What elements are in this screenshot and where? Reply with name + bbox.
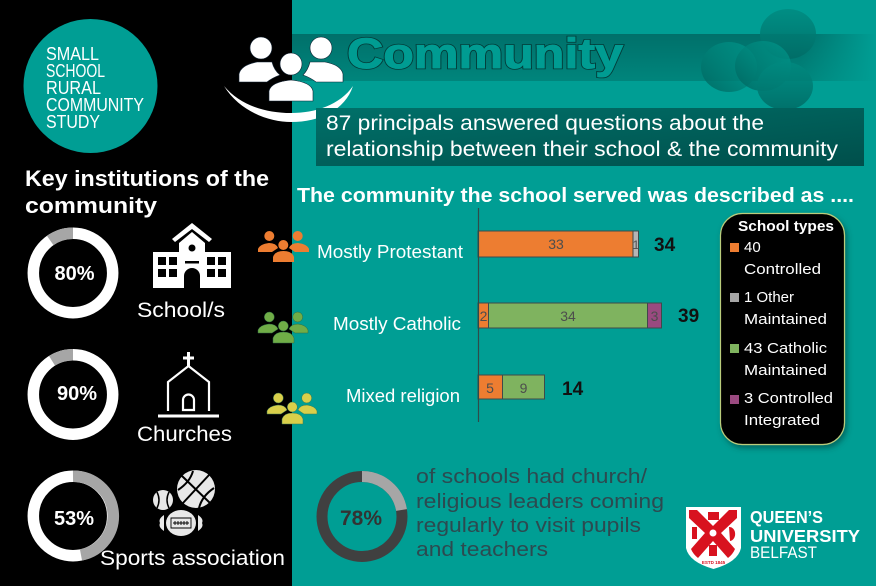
axis bbox=[478, 208, 480, 422]
title band bbox=[292, 34, 876, 81]
heading: key institutions: Key institutions of the bbox=[25, 166, 269, 191]
bar values: 1 bbox=[633, 238, 640, 252]
donut: sports 53% bbox=[33, 476, 113, 556]
panel: teal main area bbox=[292, 0, 876, 586]
logo: Queen's University Belfast: ESTD 1845 bbox=[702, 560, 726, 565]
icon: green people bbox=[258, 312, 308, 343]
bar values: 3 bbox=[651, 308, 659, 324]
heading: key institutions bbox=[25, 166, 269, 218]
title: Community: Community bbox=[347, 30, 623, 78]
legend: school types: 3 Controlled bbox=[744, 390, 833, 407]
category labels: Mostly Protestant bbox=[317, 242, 463, 262]
heading: key institutions: community bbox=[25, 193, 158, 218]
decorative overlapping circles bbox=[701, 9, 816, 110]
legend: school types: Integrated bbox=[744, 412, 820, 429]
icon: church bbox=[158, 352, 219, 416]
label: sports association: Sports association bbox=[100, 547, 285, 570]
icon: school building bbox=[153, 223, 231, 288]
heading: community description: The community the school served was described as .... bbox=[297, 185, 854, 207]
totals bbox=[562, 235, 699, 400]
donut: churches 90% bbox=[33, 355, 113, 434]
icon: orange people bbox=[258, 231, 309, 262]
panel: black left column bbox=[0, 0, 292, 586]
bar values bbox=[480, 236, 659, 396]
donut: religious leaders 78% bbox=[322, 476, 402, 556]
logo: Small School Rural Community Study: RURAL bbox=[46, 78, 101, 98]
legend: school types: 40 bbox=[744, 239, 761, 256]
legend: school types: 1 Other bbox=[744, 289, 794, 306]
panel: intro text box: 87 principals answered questions about the bbox=[326, 112, 764, 135]
logo: Small School Rural Community Study: SMALL bbox=[46, 44, 99, 64]
bar values: 2 bbox=[480, 308, 488, 324]
donut: schools 80% bbox=[33, 233, 113, 313]
text: religious leaders: religious leaders coming bbox=[416, 491, 664, 513]
panel: intro text box bbox=[316, 108, 864, 166]
logo: Small School Rural Community Study: STUDY bbox=[46, 112, 100, 132]
totals: 14 bbox=[562, 379, 584, 400]
legend: school types: Maintained bbox=[744, 362, 827, 379]
logo: Queen's University Belfast: BELFAST bbox=[750, 544, 817, 562]
donut: religious leaders 78%: 78% bbox=[340, 507, 382, 530]
title: Community: Community bbox=[347, 30, 623, 78]
logo: Small School Rural Community Study: COMMUNITY bbox=[46, 95, 144, 115]
donut: churches 90%: 90% bbox=[57, 383, 97, 405]
legend: school types: Controlled bbox=[744, 261, 821, 278]
donut: sports 53%: 53% bbox=[54, 508, 94, 530]
bar values: 5 bbox=[486, 380, 494, 396]
icon: community people and smile bbox=[224, 37, 353, 122]
category labels bbox=[317, 242, 463, 406]
stacked bar chart bbox=[317, 208, 699, 422]
totals: 39 bbox=[678, 306, 699, 327]
bars bbox=[478, 231, 662, 399]
bar values: 34 bbox=[560, 308, 576, 324]
bar values: 9 bbox=[520, 380, 528, 396]
legend: school types: Maintained bbox=[744, 311, 827, 328]
text: religious leaders: of schools had church/ bbox=[416, 466, 648, 488]
panel: intro text box: relationship between their school & the community bbox=[326, 138, 839, 161]
title band fade bbox=[800, 34, 876, 81]
category labels: Mixed religion bbox=[346, 386, 460, 406]
logo: Small School Rural Community Study bbox=[24, 19, 158, 153]
logo: Queen's University Belfast: QUEEN’S bbox=[750, 507, 823, 527]
logo: Queen's University Belfast bbox=[686, 507, 860, 569]
logo: Queen's University Belfast: UNIVERSITY bbox=[750, 526, 860, 546]
label: schools: School/s bbox=[137, 299, 225, 322]
label: churches: Churches bbox=[137, 423, 232, 446]
bar values: 33 bbox=[548, 236, 564, 252]
logo: Small School Rural Community Study: SCHOOL bbox=[46, 61, 105, 81]
text: religious leaders: and teachers bbox=[416, 539, 548, 561]
totals: 34 bbox=[654, 235, 676, 256]
legend: school types: School types bbox=[738, 219, 834, 235]
icon: yellow people bbox=[267, 393, 317, 424]
legend: school types: 43 Catholic bbox=[744, 340, 828, 357]
text: religious leaders: regularly to visit pupils bbox=[416, 515, 641, 537]
legend: school types bbox=[720, 214, 844, 444]
donut: schools 80%: 80% bbox=[54, 263, 95, 285]
icon: sports balls bbox=[153, 470, 215, 536]
text: religious leaders bbox=[416, 466, 664, 561]
category labels: Mostly Catholic bbox=[333, 314, 461, 334]
